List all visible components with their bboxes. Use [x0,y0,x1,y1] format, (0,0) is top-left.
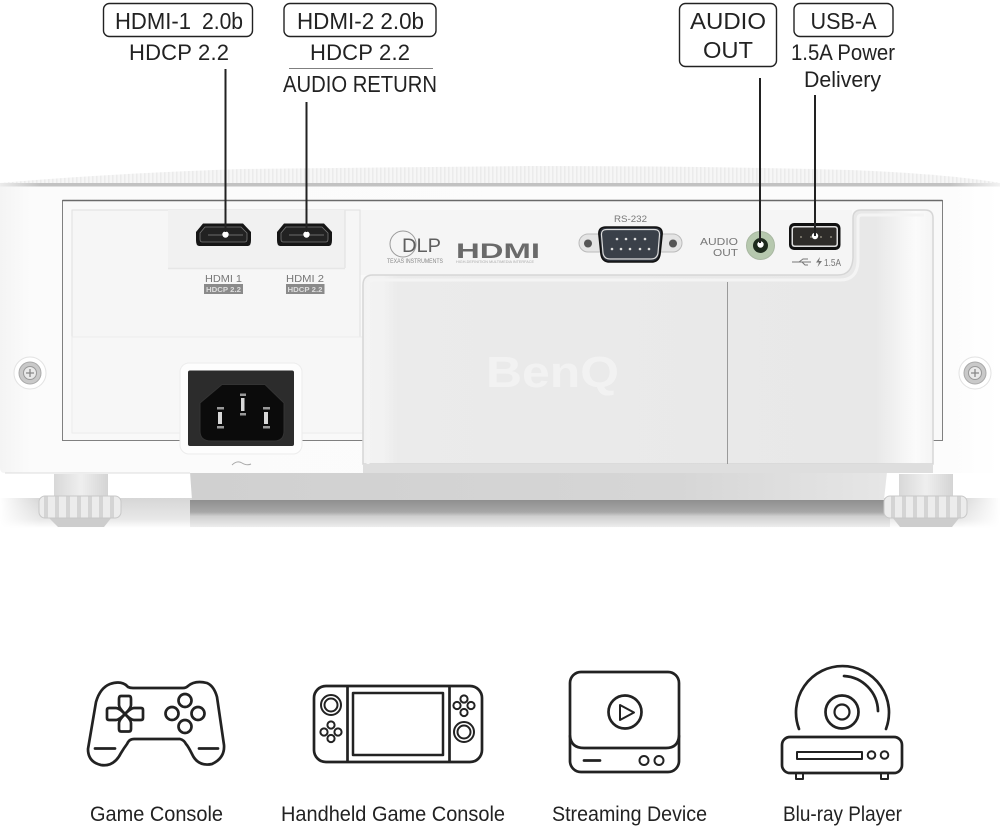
icon: handheld [314,686,482,762]
right foot [884,474,967,527]
label: Streaming Device [552,803,707,826]
device: handheld game console [281,686,505,826]
HDMI 1 label [204,274,243,294]
vent strip [0,166,1000,186]
callout: HDMI-1: 2.0b [202,8,243,34]
rear recessed panel [62,200,942,440]
callout: USB-A: Delivery [804,67,881,92]
label: Handheld Game Console [281,803,505,826]
HDMI 2 label [286,274,324,294]
icon: disc player [782,666,902,779]
device: blu-ray player [782,666,902,826]
callout: USB-A [791,4,895,236]
callout: audio out [680,4,776,243]
callout: HDMI-2: AUDIO RETURN [283,71,437,97]
device: game console [88,682,224,826]
audio out port [700,232,774,260]
USB-A port: 1.5A [824,257,841,269]
logo: HDMI: HIGH-DEFINITION MULTIMEDIA INTERFACE [456,260,535,264]
icon: streaming box [570,672,679,772]
HDMI 1 label: HDMI 1 [205,274,242,285]
projector body [0,186,1000,473]
callout: HDMI-1: HDMI-1 [115,8,191,34]
logo: HDMI [456,240,540,264]
left foot [39,474,121,527]
callout: HDMI-2: HDCP 2.2 [310,40,410,65]
label: Blu-ray Player [783,803,902,826]
logo: DLP [387,231,444,265]
underside [190,472,887,500]
power inlet [180,363,302,465]
logo: DLP: DLP [402,236,441,257]
left screw [14,357,46,389]
callout: HDMI-1: HDCP 2.2 [129,40,229,65]
BenQ logo: BenQ [486,348,619,397]
HDMI 1 label: HDCP 2.2 [206,285,241,294]
audio out port: OUT [713,247,739,259]
callout: HDMI-2 [283,4,437,232]
callout: HDMI-2: HDMI-2 2.0b [297,8,424,34]
projector rear view [0,166,1000,528]
icon: gamepad [88,682,224,765]
label: Game Console [90,803,223,826]
callout: HDMI-1 [104,4,252,232]
logo: HDMI: HDMI [456,240,540,263]
RS-232 port: RS-232 [614,214,647,225]
USB-A port [789,223,841,269]
HDMI 2 port [277,224,332,246]
HDMI 1 port [196,224,251,246]
logo: DLP: TEXAS INSTRUMENTS [387,258,444,265]
audio out port: AUDIO [700,236,738,248]
callout: USB-A: USB-A [810,8,877,34]
HDMI 2 label: HDMI 2 [286,274,324,285]
right screw [959,357,991,389]
cable cover [363,210,933,473]
RS-232 port [579,214,682,262]
callout: audio out: OUT [703,37,753,63]
callout: USB-A: 1.5A Power [791,40,895,65]
floor shadow [0,498,1000,528]
callout: audio out: AUDIO [690,8,766,34]
device: streaming device [552,672,707,826]
HDMI 2 label: HDCP 2.2 [288,285,322,294]
